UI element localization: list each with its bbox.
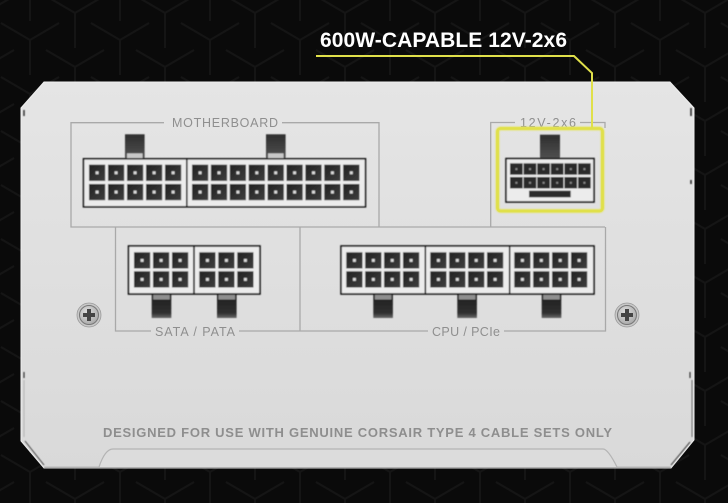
connector: 12V-2x6 — [506, 135, 594, 202]
title: 600W-capable 12V-2x6: 600W-CAPABLE 12V-2x6 — [320, 29, 567, 52]
connector: motherboard — [84, 134, 366, 207]
plate edge detailing — [24, 108, 692, 468]
heading: SATA / PATA: SATA / PATA — [155, 325, 236, 339]
heading: 12V-2x6: 12V-2x6 — [520, 116, 576, 130]
callout highlight: 12V-2x6 box — [498, 128, 602, 211]
heading: CPU / PCIe: CPU / PCIe — [432, 325, 500, 339]
connector: CPU / PCIe — [341, 246, 594, 318]
arrow: callout leader line — [316, 56, 592, 128]
icon: right screw — [615, 303, 639, 327]
connector: SATA / PATA — [128, 246, 260, 318]
text: cable compatibility notice: DESIGNED FOR USE WITH GENUINE CORSAIR TYPE 4 CABLE SETS ONLY — [103, 425, 612, 440]
bottom tab outline — [99, 449, 617, 467]
panel: PSU connector plate — [21, 82, 694, 468]
heading: MOTHERBOARD: MOTHERBOARD — [172, 116, 278, 130]
connector group frames — [71, 122, 606, 331]
icon: left screw — [77, 303, 101, 327]
